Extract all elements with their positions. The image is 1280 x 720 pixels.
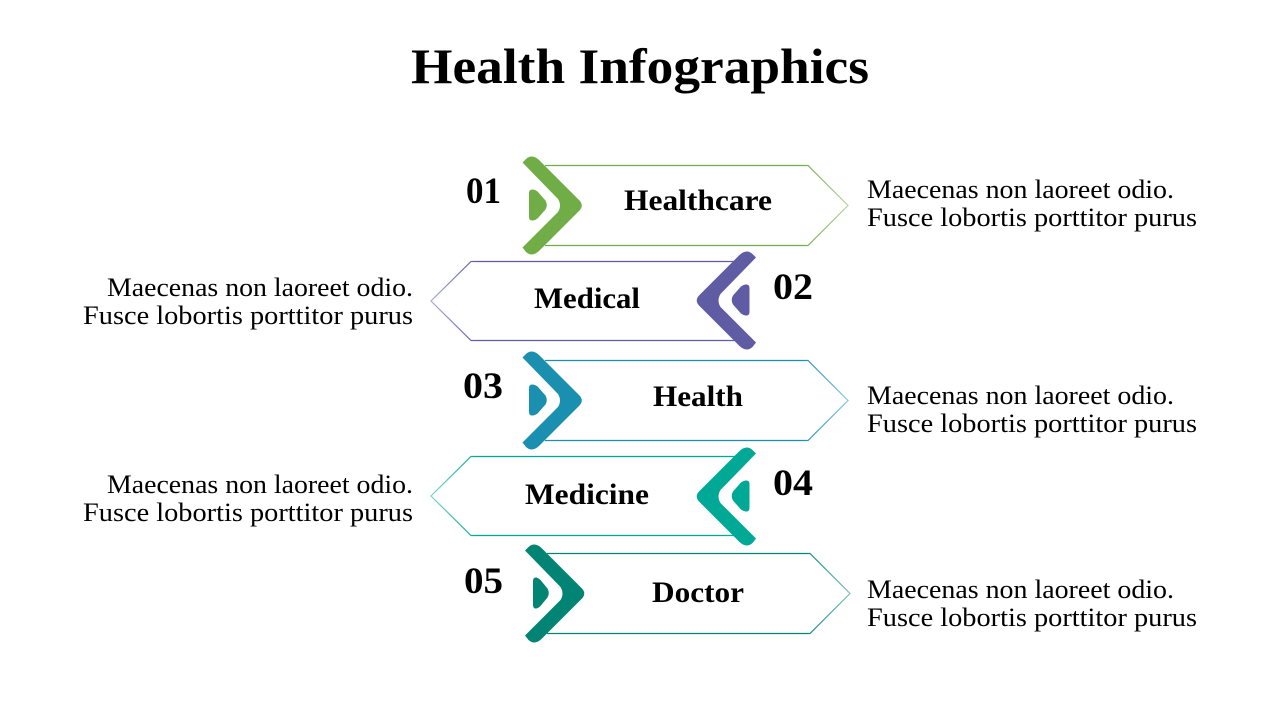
description 05 [867, 574, 1197, 632]
arrow box: Health [545, 360, 848, 440]
label: Medical: Medical [534, 282, 640, 315]
icon: chevron 04 [697, 447, 756, 546]
description 01: Maecenas non laoreet odio. [867, 174, 1174, 204]
arrow box: Medicine [431, 456, 735, 536]
icon: chevron 05 [525, 544, 584, 643]
icon: chevron 02 [697, 251, 756, 350]
row 02: Medical [83, 251, 813, 350]
description 04: Fusce lobortis porttitor purus [83, 497, 413, 527]
description 04 [83, 469, 413, 527]
description 04: Maecenas non laoreet odio. [107, 469, 413, 499]
label: Healthcare: Healthcare [624, 184, 772, 217]
label: Medicine: Medicine [525, 478, 649, 511]
description 05: Maecenas non laoreet odio. [867, 574, 1174, 604]
arrow box: Medical [431, 262, 735, 340]
description 02: Fusce lobortis porttitor purus [83, 300, 413, 330]
description 01 [867, 174, 1197, 232]
label: Health: Health [653, 380, 743, 413]
number 02: 02 [773, 267, 813, 308]
description 03: Fusce lobortis porttitor purus [867, 408, 1197, 438]
icon: chevron 01 [522, 156, 582, 255]
row 03: Health [463, 351, 1197, 450]
description 03 [867, 380, 1197, 438]
title: Health Infographics [411, 39, 869, 94]
description 01: Fusce lobortis porttitor purus [867, 202, 1197, 232]
description 03: Maecenas non laoreet odio. [867, 380, 1174, 410]
description 02: Maecenas non laoreet odio. [107, 272, 413, 302]
row 01: Healthcare [466, 156, 1197, 255]
number 03: 03 [463, 366, 503, 407]
row 05: Doctor [464, 544, 1197, 643]
number 04: 04 [773, 463, 813, 504]
description 05: Fusce lobortis porttitor purus [867, 602, 1197, 632]
arrow box: Healthcare [545, 166, 848, 246]
icon: chevron 03 [522, 351, 582, 450]
number 05: 05 [464, 561, 503, 602]
description 02 [83, 272, 413, 330]
label: Doctor: Doctor [652, 576, 744, 609]
arrow box: Doctor [547, 554, 850, 634]
row 04: Medicine [83, 447, 813, 546]
number 01: 01 [466, 171, 501, 212]
